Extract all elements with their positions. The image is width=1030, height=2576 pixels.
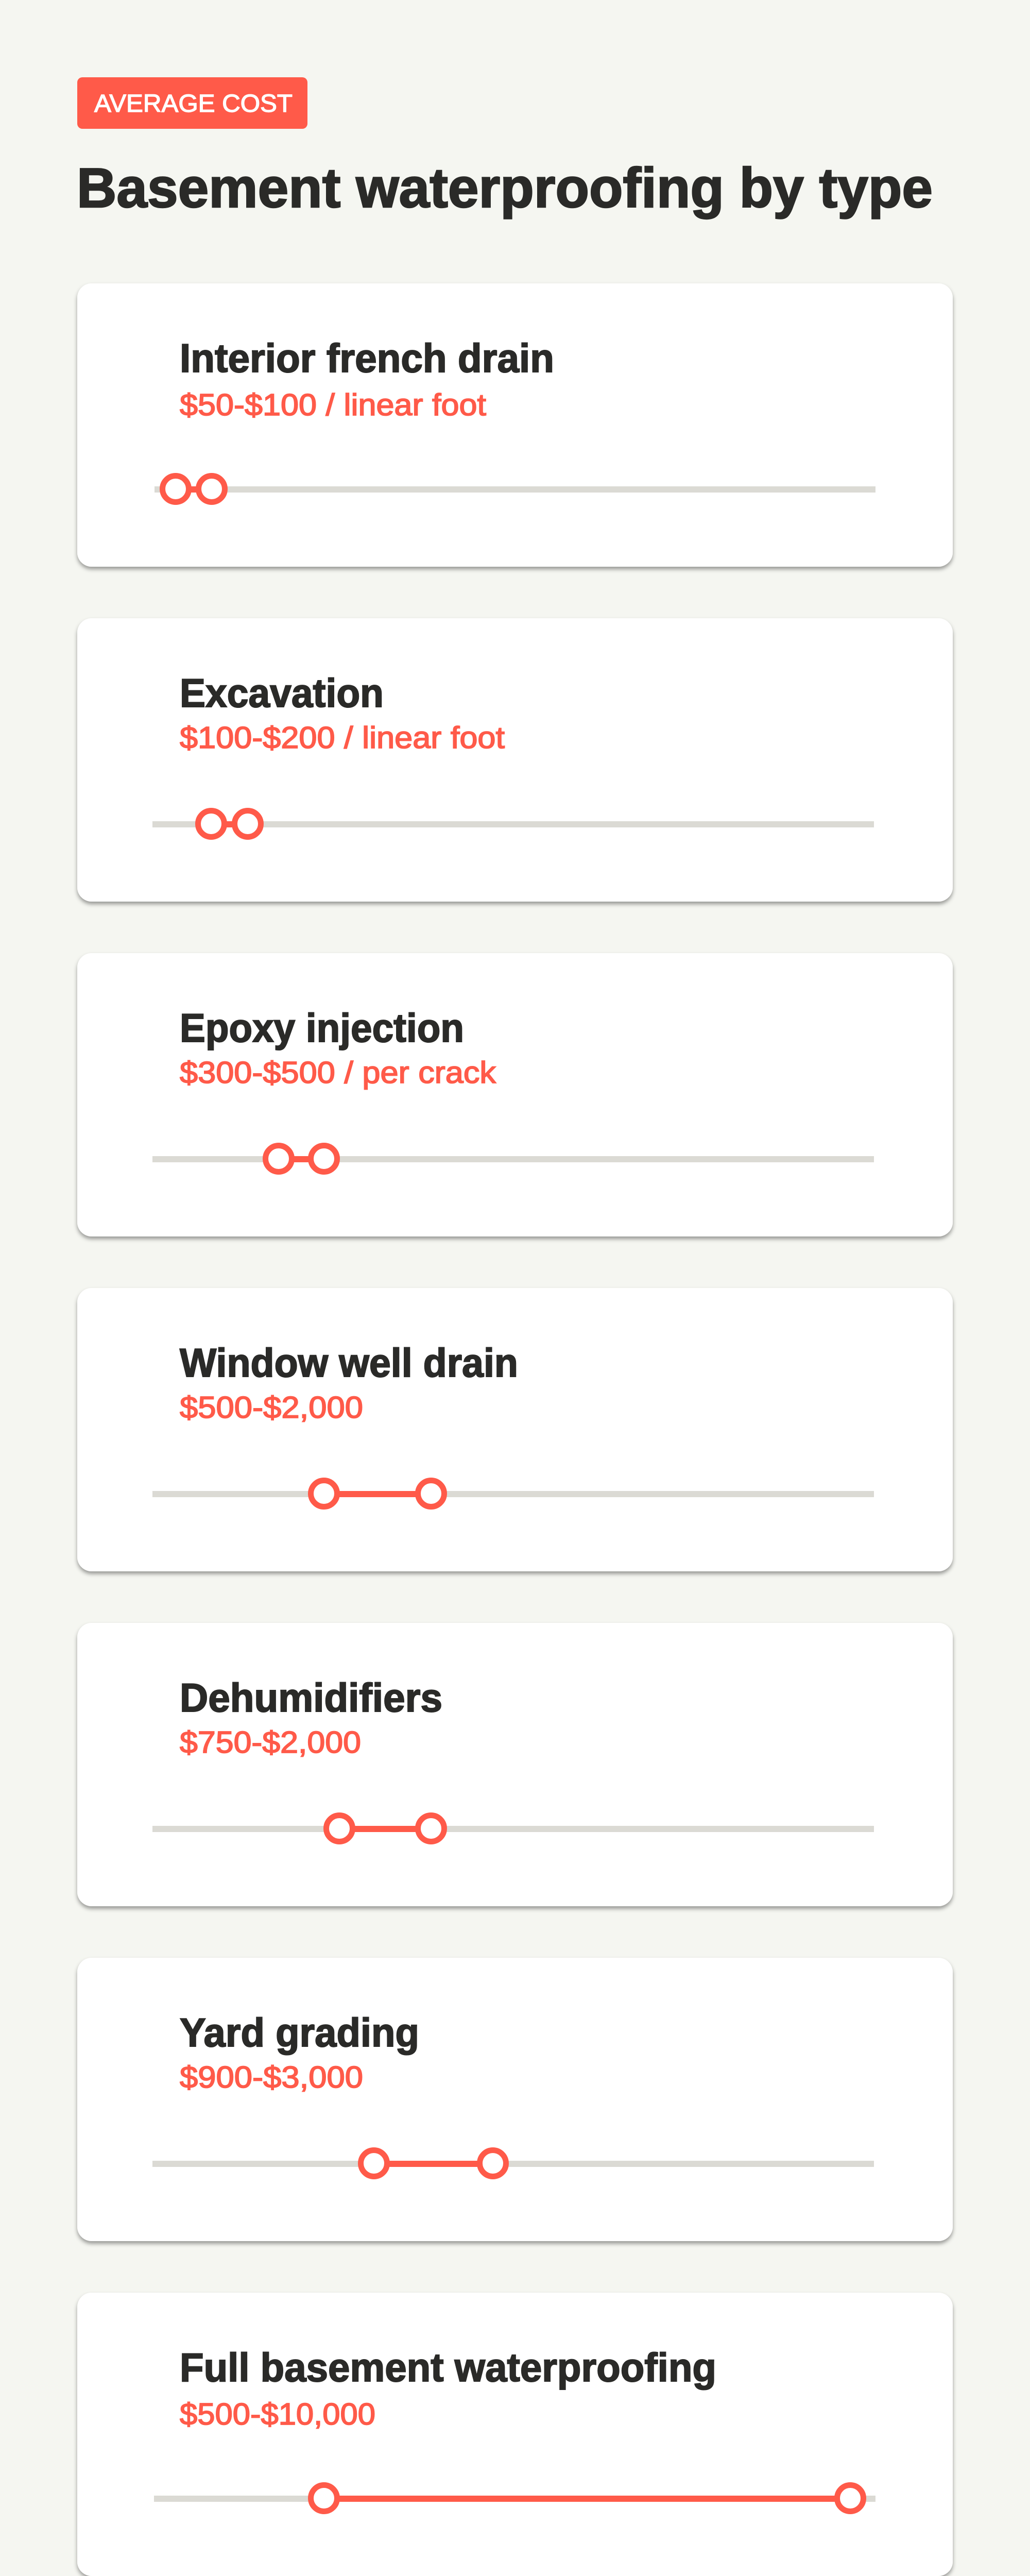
range chart: $900-$3,000 <box>152 2150 874 2176</box>
range chart: $50-$100 <box>154 476 876 502</box>
panel: excavation: Excavation <box>180 670 384 716</box>
badge: average cost <box>77 77 307 129</box>
range chart: $500-$10,000 <box>154 2485 876 2511</box>
panel: yard grading: Yard grading <box>180 2010 419 2055</box>
panel: dehumidifiers: $750-$2,000 <box>180 1725 361 1759</box>
panel: interior french drain <box>77 283 953 567</box>
panel: window well drain: Window well drain <box>180 1340 518 1385</box>
range chart: $300-$500 <box>152 1146 874 1172</box>
panel: epoxy injection: Epoxy injection <box>180 1005 464 1050</box>
panel: interior french drain: $50-$100 / linear foot <box>180 388 486 422</box>
panel: dehumidifiers <box>77 1623 953 1906</box>
title: Basement waterproofing by type <box>77 157 933 219</box>
panel: excavation: $100-$200 / linear foot <box>180 721 505 755</box>
range chart: $750-$2,000 <box>152 1816 874 1841</box>
panel: yard grading: $900-$3,000 <box>180 2060 363 2094</box>
panel: yard grading <box>77 1958 953 2241</box>
panel: interior french drain: Interior french drain <box>180 335 554 381</box>
panel: full basement waterproofing: Full basement waterproofing <box>180 2345 716 2390</box>
panel: window well drain: $500-$2,000 <box>180 1391 363 1425</box>
range chart: $100-$200 <box>152 811 874 837</box>
badge: average cost: AVERAGE COST <box>94 90 293 117</box>
panel: window well drain <box>77 1288 953 1571</box>
panel: excavation <box>77 618 953 902</box>
panel: full basement waterproofing: $500-$10,000 <box>180 2397 375 2431</box>
panel: full basement waterproofing <box>77 2293 953 2576</box>
panel: epoxy injection <box>77 953 953 1236</box>
panel: epoxy injection: $300-$500 / per crack <box>180 1056 496 1090</box>
panel: dehumidifiers: Dehumidifiers <box>180 1675 442 1720</box>
range chart: $500-$2,000 <box>152 1481 874 1506</box>
